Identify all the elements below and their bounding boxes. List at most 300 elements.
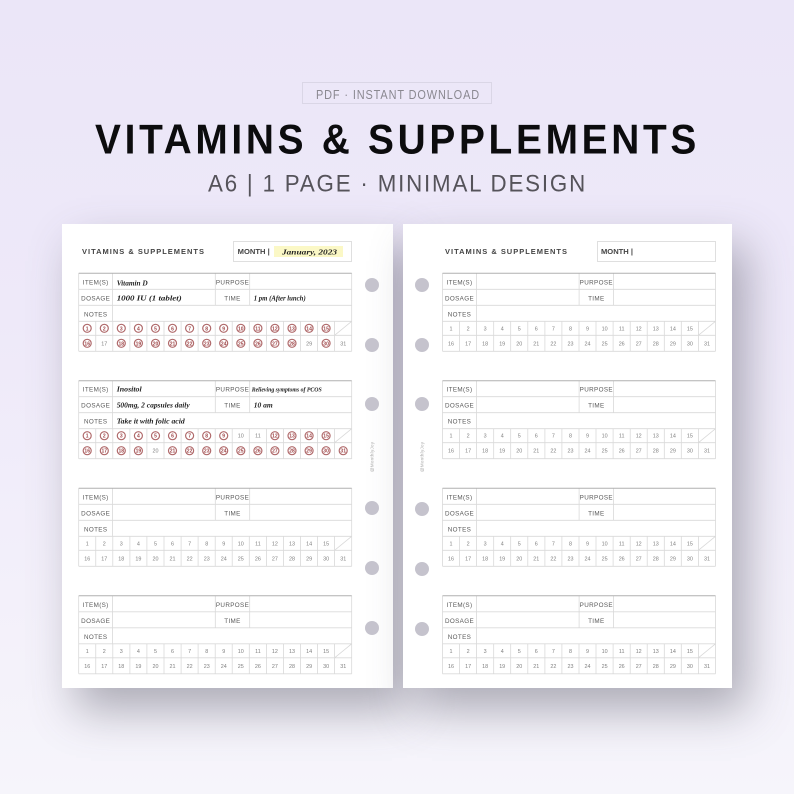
tracker card: blank right 3: 27 bbox=[636, 556, 642, 562]
tracker card: blank left 3: 4 bbox=[137, 541, 140, 547]
tracker card: blank right 4: 12 bbox=[636, 649, 642, 655]
tracker card: Inositol: 11 bbox=[255, 434, 261, 440]
tracker card: Vitamin D: 28 bbox=[289, 341, 295, 347]
tracker card: blank right 1: DOSAGE bbox=[445, 295, 474, 302]
tracker card: Vitamin D: 22 bbox=[187, 341, 193, 347]
tracker card: Inositol: TIME bbox=[224, 403, 241, 410]
tracker card: blank right 4: PURPOSE bbox=[580, 602, 613, 609]
tracker card: Inositol: 1 bbox=[86, 434, 89, 440]
tracker card: blank right 3: DOSAGE bbox=[445, 510, 474, 517]
tracker card: blank left 4: TIME bbox=[224, 618, 241, 625]
tracker card: Vitamin D: 11 bbox=[255, 326, 261, 332]
tracker card: blank right 1 bbox=[442, 273, 716, 351]
tracker card: blank right 3: 28 bbox=[653, 556, 659, 562]
tracker card: blank right 2 bbox=[442, 381, 716, 459]
tracker card: blank right 1: 2 bbox=[467, 326, 470, 332]
tracker card: blank right 2: 21 bbox=[533, 449, 539, 455]
tracker card: Inositol: 15 bbox=[323, 434, 329, 440]
tracker card: blank left 4: 29 bbox=[306, 664, 312, 670]
tracker card: blank left 4: 12 bbox=[272, 649, 278, 655]
tracker card: blank right 3: 5 bbox=[518, 541, 521, 547]
tracker card: Inositol: 14 bbox=[306, 434, 312, 440]
tracker card: blank right 1: 14 bbox=[670, 326, 676, 332]
tracker card: blank right 4: 29 bbox=[670, 664, 676, 670]
badge: PDF instant download bbox=[302, 82, 492, 104]
tracker card: blank right 4: 24 bbox=[584, 664, 590, 670]
tracker card: blank right 3: 11 bbox=[619, 541, 625, 547]
tracker card: blank right 3: 12 bbox=[636, 541, 642, 547]
tracker card: blank right 3: PURPOSE bbox=[580, 494, 613, 501]
tracker card: blank right 1: 27 bbox=[636, 341, 642, 347]
tracker card: blank right 1: 25 bbox=[602, 341, 608, 347]
tracker card: blank right 1: 4 bbox=[501, 326, 504, 332]
tracker card: blank right 2: 28 bbox=[653, 449, 659, 455]
tracker card: Inositol: 28 bbox=[289, 449, 295, 455]
tracker card: blank right 4 bbox=[442, 596, 716, 674]
tracker card: blank left 4: 2 bbox=[103, 649, 106, 655]
left page header: MONTH | bbox=[238, 247, 270, 256]
tracker card: blank left 3: 5 bbox=[154, 541, 157, 547]
tracker card: Vitamin D: DOSAGE bbox=[81, 295, 110, 302]
tracker card: blank left 4: NOTES bbox=[84, 634, 107, 641]
tracker card: blank right 1: 16 bbox=[448, 341, 454, 347]
tracker card: Vitamin D: 8 bbox=[205, 326, 208, 332]
tracker card: Vitamin D: NOTES bbox=[84, 311, 107, 318]
tracker card: blank left 4: ITEM(S) bbox=[83, 602, 109, 609]
tracker card: Inositol: 9 bbox=[222, 434, 225, 440]
tracker card: blank right 1: 31 bbox=[704, 341, 710, 347]
tracker card: blank right 1: 26 bbox=[619, 341, 625, 347]
tracker card: blank left 4: 24 bbox=[221, 664, 227, 670]
tracker card: Vitamin D: 10 bbox=[238, 326, 244, 332]
tracker card: blank right 3: 7 bbox=[552, 541, 555, 547]
tracker card: blank right 4: NOTES bbox=[448, 634, 471, 641]
tracker card: blank right 3: 29 bbox=[670, 556, 676, 562]
day circles bbox=[83, 324, 330, 347]
tracker card: blank left 4: 9 bbox=[222, 649, 225, 655]
tracker card: Inositol: 4 bbox=[137, 434, 140, 440]
tracker card: Inositol: 18 bbox=[119, 449, 124, 455]
tracker card: blank right 4: 7 bbox=[552, 649, 555, 655]
tracker card: blank left 3: PURPOSE bbox=[216, 494, 249, 501]
tracker card: blank left 3: 13 bbox=[289, 541, 295, 547]
tracker card: blank right 4: 18 bbox=[482, 664, 488, 670]
tracker card: blank left 3: 26 bbox=[255, 556, 261, 562]
tracker card: blank right 1: 8 bbox=[569, 326, 572, 332]
tracker card: blank right 2: 11 bbox=[619, 434, 625, 440]
tracker card: blank right 1: 19 bbox=[499, 341, 505, 347]
tracker card: Inositol: 24 bbox=[221, 449, 227, 455]
tracker card: blank left 4: 18 bbox=[118, 664, 124, 670]
tracker card: blank right 4: 6 bbox=[535, 649, 538, 655]
tracker card: blank left 3: 30 bbox=[323, 556, 329, 562]
tracker card: blank left 4: 15 bbox=[323, 649, 329, 655]
tracker card: blank right 4: 28 bbox=[653, 664, 659, 670]
tracker card: blank right 1: 18 bbox=[482, 341, 488, 347]
tracker card: blank right 4: 22 bbox=[550, 664, 556, 670]
tracker card: blank right 3: 18 bbox=[482, 556, 488, 562]
tracker card: blank right 2: 13 bbox=[653, 434, 659, 440]
tracker card: Inositol: 10 bbox=[238, 434, 244, 440]
tracker card: blank right 4: 21 bbox=[533, 664, 539, 670]
tracker card: blank right 3: 10 bbox=[602, 541, 608, 547]
tracker card: blank right 2: 17 bbox=[465, 449, 471, 455]
tracker card: blank right 2: TIME bbox=[588, 403, 605, 410]
tracker card: blank right 3: 21 bbox=[533, 556, 539, 562]
tracker card: blank right 1: 12 bbox=[636, 326, 642, 332]
tracker card: blank left 3: 21 bbox=[170, 556, 176, 562]
tracker card: blank left 4: 28 bbox=[289, 664, 295, 670]
right page header bbox=[445, 242, 716, 262]
tracker card: blank right 4: 2 bbox=[467, 649, 470, 655]
tracker card: blank right 4: TIME bbox=[588, 618, 605, 625]
left page header bbox=[82, 242, 352, 262]
tracker card: blank right 2: 3 bbox=[484, 434, 487, 440]
tracker card: Vitamin D: 21 bbox=[170, 341, 175, 347]
tracker card: blank left 3: 28 bbox=[289, 556, 295, 562]
tracker card: blank right 4: 16 bbox=[448, 664, 454, 670]
tracker card: blank left 4: 26 bbox=[255, 664, 261, 670]
tracker card: blank left 4: 20 bbox=[152, 664, 158, 670]
tracker card: blank right 1: ITEM(S) bbox=[447, 279, 472, 286]
right watermark: @MonthlyJoy bbox=[420, 441, 424, 472]
tracker card: blank left 4: 11 bbox=[255, 649, 261, 655]
tracker card: Inositol: 22 bbox=[187, 449, 193, 455]
tracker card: blank left 4: PURPOSE bbox=[216, 602, 249, 609]
tracker card: Vitamin D: 5 bbox=[154, 326, 157, 332]
tracker card: blank right 3: 24 bbox=[584, 556, 590, 562]
tracker card: Inositol: Take it with folic acid bbox=[117, 417, 185, 426]
tracker card: Vitamin D: 23 bbox=[204, 341, 210, 347]
tracker card: blank left 3: DOSAGE bbox=[81, 510, 110, 517]
tracker card: blank right 2: 6 bbox=[535, 434, 538, 440]
tracker card: blank right 2: 25 bbox=[602, 449, 608, 455]
tracker card: Inositol: 21 bbox=[170, 449, 175, 455]
tracker card: blank right 3: 14 bbox=[670, 541, 676, 547]
tracker card: blank right 1: TIME bbox=[588, 295, 605, 302]
tracker card: Inositol: PURPOSE bbox=[216, 387, 249, 394]
tracker card: blank left 4 bbox=[79, 596, 352, 674]
tracker card: blank right 2: 26 bbox=[619, 449, 625, 455]
tracker card: blank right 1: 20 bbox=[516, 341, 522, 347]
tracker card: blank left 3: 23 bbox=[204, 556, 210, 562]
tracker card: blank left 3: TIME bbox=[224, 510, 241, 517]
tracker card: Vitamin D: 14 bbox=[306, 326, 312, 332]
tracker card: Vitamin D: 1000 IU (1 tablet) bbox=[117, 293, 182, 302]
tracker card: blank right 1: 13 bbox=[653, 326, 659, 332]
tracker card: blank left 4: 5 bbox=[154, 649, 157, 655]
tracker card: blank right 1: 10 bbox=[602, 326, 608, 332]
day circles bbox=[83, 432, 347, 455]
tracker card: Vitamin D: 16 bbox=[84, 341, 90, 347]
tracker card: Vitamin D: 24 bbox=[221, 341, 227, 347]
tracker card: Vitamin D: 30 bbox=[323, 341, 329, 347]
tracker card: blank right 3: 3 bbox=[484, 541, 487, 547]
tracker card: blank right 3: 31 bbox=[704, 556, 710, 562]
tracker card: blank right 2: 23 bbox=[568, 449, 574, 455]
tracker card: blank right 1: 15 bbox=[687, 326, 693, 332]
tracker card: blank right 3 bbox=[442, 488, 716, 566]
tracker card: blank right 1: 3 bbox=[484, 326, 487, 332]
tracker card: Inositol: 7 bbox=[188, 434, 191, 440]
tracker card: Inositol: DOSAGE bbox=[81, 403, 110, 410]
tracker card: blank right 2: 18 bbox=[482, 449, 488, 455]
tracker card: blank right 1: 1 bbox=[450, 326, 452, 332]
tracker card: blank right 3: 6 bbox=[535, 541, 538, 547]
tracker card: blank right 2: 12 bbox=[636, 434, 642, 440]
tracker card: blank left 4: 4 bbox=[137, 649, 140, 655]
tracker card: Vitamin D: 4 bbox=[137, 326, 140, 332]
right page header: MONTH | bbox=[601, 247, 633, 256]
tracker card: blank right 4: 11 bbox=[619, 649, 625, 655]
tracker card: blank right 1: 9 bbox=[586, 326, 589, 332]
tracker card: Inositol: 16 bbox=[84, 449, 90, 455]
tracker card: blank right 3: 15 bbox=[687, 541, 693, 547]
tracker card: Vitamin D: 15 bbox=[323, 326, 329, 332]
tracker card: Inositol bbox=[79, 381, 352, 459]
tracker card: blank right 2: 5 bbox=[518, 434, 521, 440]
tracker card: Vitamin D: 7 bbox=[188, 326, 191, 332]
tracker card: blank right 4: 4 bbox=[501, 649, 504, 655]
tracker card: blank left 4: 1 bbox=[86, 649, 89, 655]
tracker card: blank left 4: 3 bbox=[120, 649, 123, 655]
tracker card: blank right 3: 13 bbox=[653, 541, 659, 547]
tracker card: blank right 2: 1 bbox=[450, 434, 452, 440]
tracker card: Inositol: 30 bbox=[323, 449, 329, 455]
tracker card: blank right 4: 23 bbox=[568, 664, 574, 670]
tracker card: blank right 4: 15 bbox=[687, 649, 693, 655]
tracker card: blank right 2: 31 bbox=[704, 449, 710, 455]
tracker card: blank right 3: ITEM(S) bbox=[447, 494, 472, 501]
tracker card: blank right 2: 15 bbox=[687, 434, 693, 440]
left page header: January, 2023 bbox=[281, 248, 337, 256]
tracker card: blank right 2: 30 bbox=[687, 449, 693, 455]
tracker card: Inositol: 31 bbox=[340, 449, 346, 455]
tracker card: Vitamin D: 17 bbox=[101, 341, 107, 347]
tracker card: Vitamin D: 3 bbox=[120, 326, 123, 332]
tracker card: blank right 1: NOTES bbox=[448, 311, 471, 318]
tracker card: blank right 2: NOTES bbox=[448, 419, 471, 426]
tracker card: blank left 4: 16 bbox=[84, 664, 90, 670]
tracker card: Inositol: 13 bbox=[289, 434, 295, 440]
tracker card: blank right 1: 6 bbox=[535, 326, 538, 332]
tracker card: blank left 4: 23 bbox=[204, 664, 210, 670]
tracker card: blank right 2: ITEM(S) bbox=[447, 387, 472, 394]
subtitle: A6 | 1 PAGE · MINIMAL DESIGN bbox=[208, 171, 587, 198]
tracker card: Vitamin D: 6 bbox=[171, 326, 174, 332]
tracker card: blank right 1: 28 bbox=[653, 341, 659, 347]
tracker card: blank left 4: 19 bbox=[135, 664, 141, 670]
tracker card: blank right 1: 7 bbox=[552, 326, 555, 332]
tracker card: blank right 3: 20 bbox=[516, 556, 522, 562]
tracker card: blank left 4: DOSAGE bbox=[81, 618, 110, 625]
tracker card: Vitamin D: PURPOSE bbox=[216, 279, 249, 286]
tracker card: Vitamin D: 19 bbox=[136, 341, 141, 347]
tracker card: Inositol: 25 bbox=[238, 449, 244, 455]
tracker card: Inositol: 12 bbox=[272, 434, 278, 440]
tracker card: blank right 2: 8 bbox=[569, 434, 572, 440]
tracker card: blank left 3: 20 bbox=[152, 556, 158, 562]
tracker card: blank left 3: NOTES bbox=[84, 526, 107, 533]
tracker card: blank right 1: 23 bbox=[568, 341, 574, 347]
tracker card: blank left 3: 16 bbox=[84, 556, 90, 562]
tracker card: blank right 4: 27 bbox=[636, 664, 642, 670]
tracker card: blank right 4: 13 bbox=[653, 649, 659, 655]
tracker card: Vitamin D: 26 bbox=[255, 341, 261, 347]
tracker card: Vitamin D: 18 bbox=[119, 341, 124, 347]
tracker card: blank right 2: 7 bbox=[552, 434, 555, 440]
tracker card: blank right 4: 5 bbox=[518, 649, 521, 655]
tracker card: blank right 3: 16 bbox=[448, 556, 454, 562]
tracker card: blank right 4: DOSAGE bbox=[445, 618, 474, 625]
tracker card: Inositol: 6 bbox=[171, 434, 174, 440]
tracker card: blank right 4: 30 bbox=[687, 664, 693, 670]
tracker card: blank left 4: 8 bbox=[205, 649, 208, 655]
tracker card: blank left 3: 2 bbox=[103, 541, 106, 547]
tracker card: blank right 4: 1 bbox=[450, 649, 452, 655]
tracker card: blank right 2: 20 bbox=[516, 449, 522, 455]
right holes bbox=[415, 278, 429, 636]
tracker card: blank right 1: 24 bbox=[584, 341, 590, 347]
tracker card: blank left 4: 30 bbox=[323, 664, 329, 670]
tracker card: blank right 3: 9 bbox=[586, 541, 589, 547]
tracker card: blank right 3: 2 bbox=[467, 541, 470, 547]
tracker card: blank left 4: 22 bbox=[187, 664, 193, 670]
tracker card: blank left 3: 22 bbox=[187, 556, 193, 562]
tracker card: blank left 3: 12 bbox=[272, 541, 278, 547]
tracker card: Vitamin D: 13 bbox=[289, 326, 295, 332]
tracker card: blank right 2: DOSAGE bbox=[445, 403, 474, 410]
tracker card: blank left 3: 1 bbox=[86, 541, 89, 547]
tracker card: blank right 2: 19 bbox=[499, 449, 505, 455]
tracker card: blank right 2: 29 bbox=[670, 449, 676, 455]
tracker card: blank left 3: 7 bbox=[188, 541, 191, 547]
tracker card: blank right 3: 26 bbox=[619, 556, 625, 562]
tracker card: blank left 3: 3 bbox=[120, 541, 123, 547]
tracker card: Inositol: 3 bbox=[120, 434, 123, 440]
tracker card: Vitamin D: 1 bbox=[86, 326, 89, 332]
tracker card: blank right 2: 9 bbox=[586, 434, 589, 440]
left holes bbox=[365, 278, 379, 635]
tracker card: blank right 2: 27 bbox=[636, 449, 642, 455]
tracker card: blank right 3: 1 bbox=[450, 541, 452, 547]
tracker card: blank left 3: 8 bbox=[205, 541, 208, 547]
tracker card: blank right 1: 17 bbox=[465, 341, 471, 347]
tracker card: blank left 3: 27 bbox=[272, 556, 278, 562]
tracker card: Inositol: 27 bbox=[272, 449, 278, 455]
tracker card: blank left 3: ITEM(S) bbox=[83, 494, 109, 501]
tracker card: Vitamin D: ITEM(S) bbox=[83, 279, 109, 286]
tracker card: blank right 4: 26 bbox=[619, 664, 625, 670]
tracker card: blank right 2: 16 bbox=[448, 449, 454, 455]
tracker card: Vitamin D: 20 bbox=[153, 341, 158, 347]
tracker card: blank right 2: 14 bbox=[670, 434, 676, 440]
tracker card: blank right 2: 10 bbox=[602, 434, 608, 440]
tracker card: Inositol: 2 bbox=[103, 434, 106, 440]
tracker card: blank left 4: 31 bbox=[340, 664, 346, 670]
tracker card: Vitamin D: 29 bbox=[306, 341, 312, 347]
tracker card: Vitamin D: Vitamin D bbox=[117, 278, 148, 287]
tracker card: blank right 4: 31 bbox=[704, 664, 710, 670]
tracker card: blank right 4: 8 bbox=[569, 649, 572, 655]
tracker card: Inositol: 20 bbox=[152, 449, 158, 455]
tracker card: Vitamin D: TIME bbox=[224, 295, 241, 302]
tracker card: blank right 3: 8 bbox=[569, 541, 572, 547]
tracker card: blank left 3: 19 bbox=[135, 556, 141, 562]
tracker card: blank right 4: 14 bbox=[670, 649, 676, 655]
tracker card: blank right 3: 19 bbox=[499, 556, 505, 562]
tracker card: blank left 4: 7 bbox=[188, 649, 191, 655]
tracker card: Inositol: ITEM(S) bbox=[83, 387, 109, 394]
tracker card: blank right 4: 17 bbox=[465, 664, 471, 670]
tracker card: Vitamin D: 2 bbox=[103, 326, 106, 332]
tracker card: blank left 3: 6 bbox=[171, 541, 174, 547]
left page bbox=[62, 224, 393, 688]
tracker card: blank right 2: PURPOSE bbox=[580, 387, 613, 394]
tracker card: Inositol: Inositol bbox=[116, 385, 143, 394]
tracker card: blank right 4: 3 bbox=[484, 649, 487, 655]
tracker card: Inositol: 23 bbox=[204, 449, 210, 455]
tracker card: blank right 4: 9 bbox=[586, 649, 589, 655]
tracker card: blank right 4: ITEM(S) bbox=[447, 602, 472, 609]
tracker card: blank right 3: 22 bbox=[550, 556, 556, 562]
tracker card: blank right 4: 10 bbox=[602, 649, 608, 655]
tracker card: blank right 4: 25 bbox=[602, 664, 608, 670]
tracker card: blank right 3: 25 bbox=[602, 556, 608, 562]
tracker card: blank right 3: TIME bbox=[588, 510, 605, 517]
tracker card: blank right 3: NOTES bbox=[448, 526, 471, 533]
tracker card: Vitamin D: 31 bbox=[340, 341, 346, 347]
tracker card: Inositol: 26 bbox=[255, 449, 261, 455]
tracker card: blank right 1: 22 bbox=[550, 341, 556, 347]
tracker card: blank left 3: 15 bbox=[323, 541, 329, 547]
tracker card: Inositol: Relieving symptoms of PCOS bbox=[251, 387, 322, 394]
tracker card: Inositol: 17 bbox=[102, 449, 107, 455]
tracker card: Inositol: 29 bbox=[306, 449, 312, 455]
tracker card: blank left 4: 6 bbox=[171, 649, 174, 655]
badge: PDF instant download: PDF · INSTANT DOWNLOAD bbox=[316, 88, 480, 102]
tracker card: blank right 3: 4 bbox=[501, 541, 504, 547]
tracker card: Inositol: 19 bbox=[136, 449, 141, 455]
tracker card: blank left 4: 21 bbox=[170, 664, 176, 670]
tracker card: blank left 4: 27 bbox=[272, 664, 278, 670]
tracker card: blank right 1: 5 bbox=[518, 326, 521, 332]
tracker card: blank right 2: 4 bbox=[501, 434, 504, 440]
tracker card: blank left 3: 18 bbox=[118, 556, 124, 562]
tracker card: Vitamin D: 27 bbox=[272, 341, 278, 347]
tracker card: blank right 3: 17 bbox=[465, 556, 471, 562]
tracker card: blank right 3: 23 bbox=[568, 556, 574, 562]
tracker card: blank right 3: 30 bbox=[687, 556, 693, 562]
tracker card: Vitamin D: 12 bbox=[272, 326, 278, 332]
tracker card: Vitamin D: 9 bbox=[222, 326, 225, 332]
tracker card: Inositol: 500mg, 2 capsules daily bbox=[117, 401, 190, 410]
tracker card: Vitamin D: 1 pm (After lunch) bbox=[254, 293, 306, 302]
tracker card: blank right 4: 19 bbox=[499, 664, 505, 670]
tracker card: blank left 4: 17 bbox=[101, 664, 107, 670]
tracker card: blank left 3: 9 bbox=[222, 541, 225, 547]
tracker card: blank right 2: 24 bbox=[584, 449, 590, 455]
tracker card: blank right 1: 29 bbox=[670, 341, 676, 347]
tracker card: blank left 4: 25 bbox=[238, 664, 244, 670]
tracker card: blank left 4: 13 bbox=[289, 649, 295, 655]
tracker card: Vitamin D bbox=[79, 273, 352, 351]
tracker card: Inositol: 8 bbox=[205, 434, 208, 440]
title: VITAMINS & SUPPLEMENTS bbox=[95, 116, 700, 162]
tracker card: blank left 3: 11 bbox=[255, 541, 261, 547]
tracker card: Inositol: NOTES bbox=[84, 419, 107, 426]
tracker card: Vitamin D: 25 bbox=[238, 341, 244, 347]
